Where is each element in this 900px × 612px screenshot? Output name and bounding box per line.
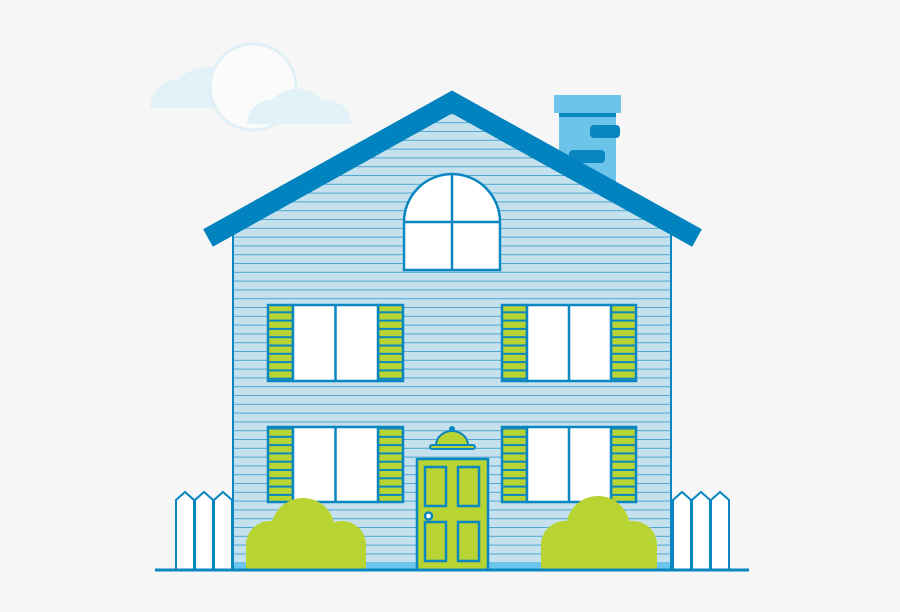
bush left	[246, 498, 366, 569]
ground line	[155, 568, 749, 572]
windows	[268, 305, 636, 502]
roof	[208, 102, 697, 238]
clouds and moon	[150, 42, 351, 132]
moon	[210, 44, 296, 130]
cloud left	[150, 67, 214, 108]
house body	[233, 110, 671, 570]
window lower left	[268, 427, 403, 502]
fence left	[176, 492, 232, 570]
chimney	[554, 95, 621, 188]
house illustration	[150, 42, 749, 572]
window lower right	[502, 427, 636, 502]
cloud right	[247, 89, 351, 124]
door lamp	[430, 427, 475, 449]
window upper right	[502, 305, 636, 381]
arched window	[404, 174, 500, 270]
bush right	[541, 496, 657, 569]
door	[417, 459, 488, 570]
fence right	[673, 492, 729, 570]
window upper left	[268, 305, 403, 381]
